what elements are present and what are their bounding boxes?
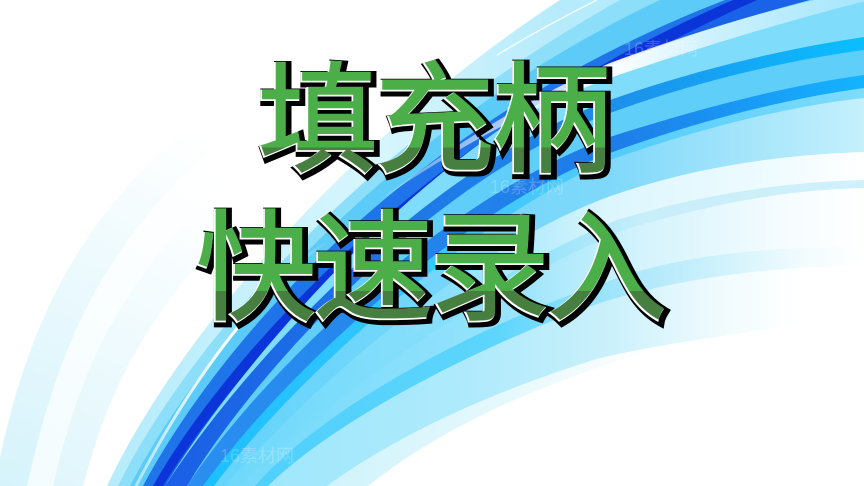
watermarks: 16素材网 [490, 177, 564, 197]
title line 1: 填充柄: 填充柄 [258, 54, 609, 188]
watermarks: 16素材网 [624, 39, 698, 59]
watermarks: 16素材网 [220, 446, 294, 466]
title line 1: 填充柄: 填充柄 [257, 55, 608, 189]
title line 1: 填充柄: 填充柄 [260, 57, 611, 191]
watermarks [220, 39, 698, 466]
title line 2: 快速录入: 快速录入 [198, 205, 666, 339]
title line 2: 快速录入: 快速录入 [196, 202, 664, 336]
title line 2: 快速录入: 快速录入 [195, 203, 663, 337]
